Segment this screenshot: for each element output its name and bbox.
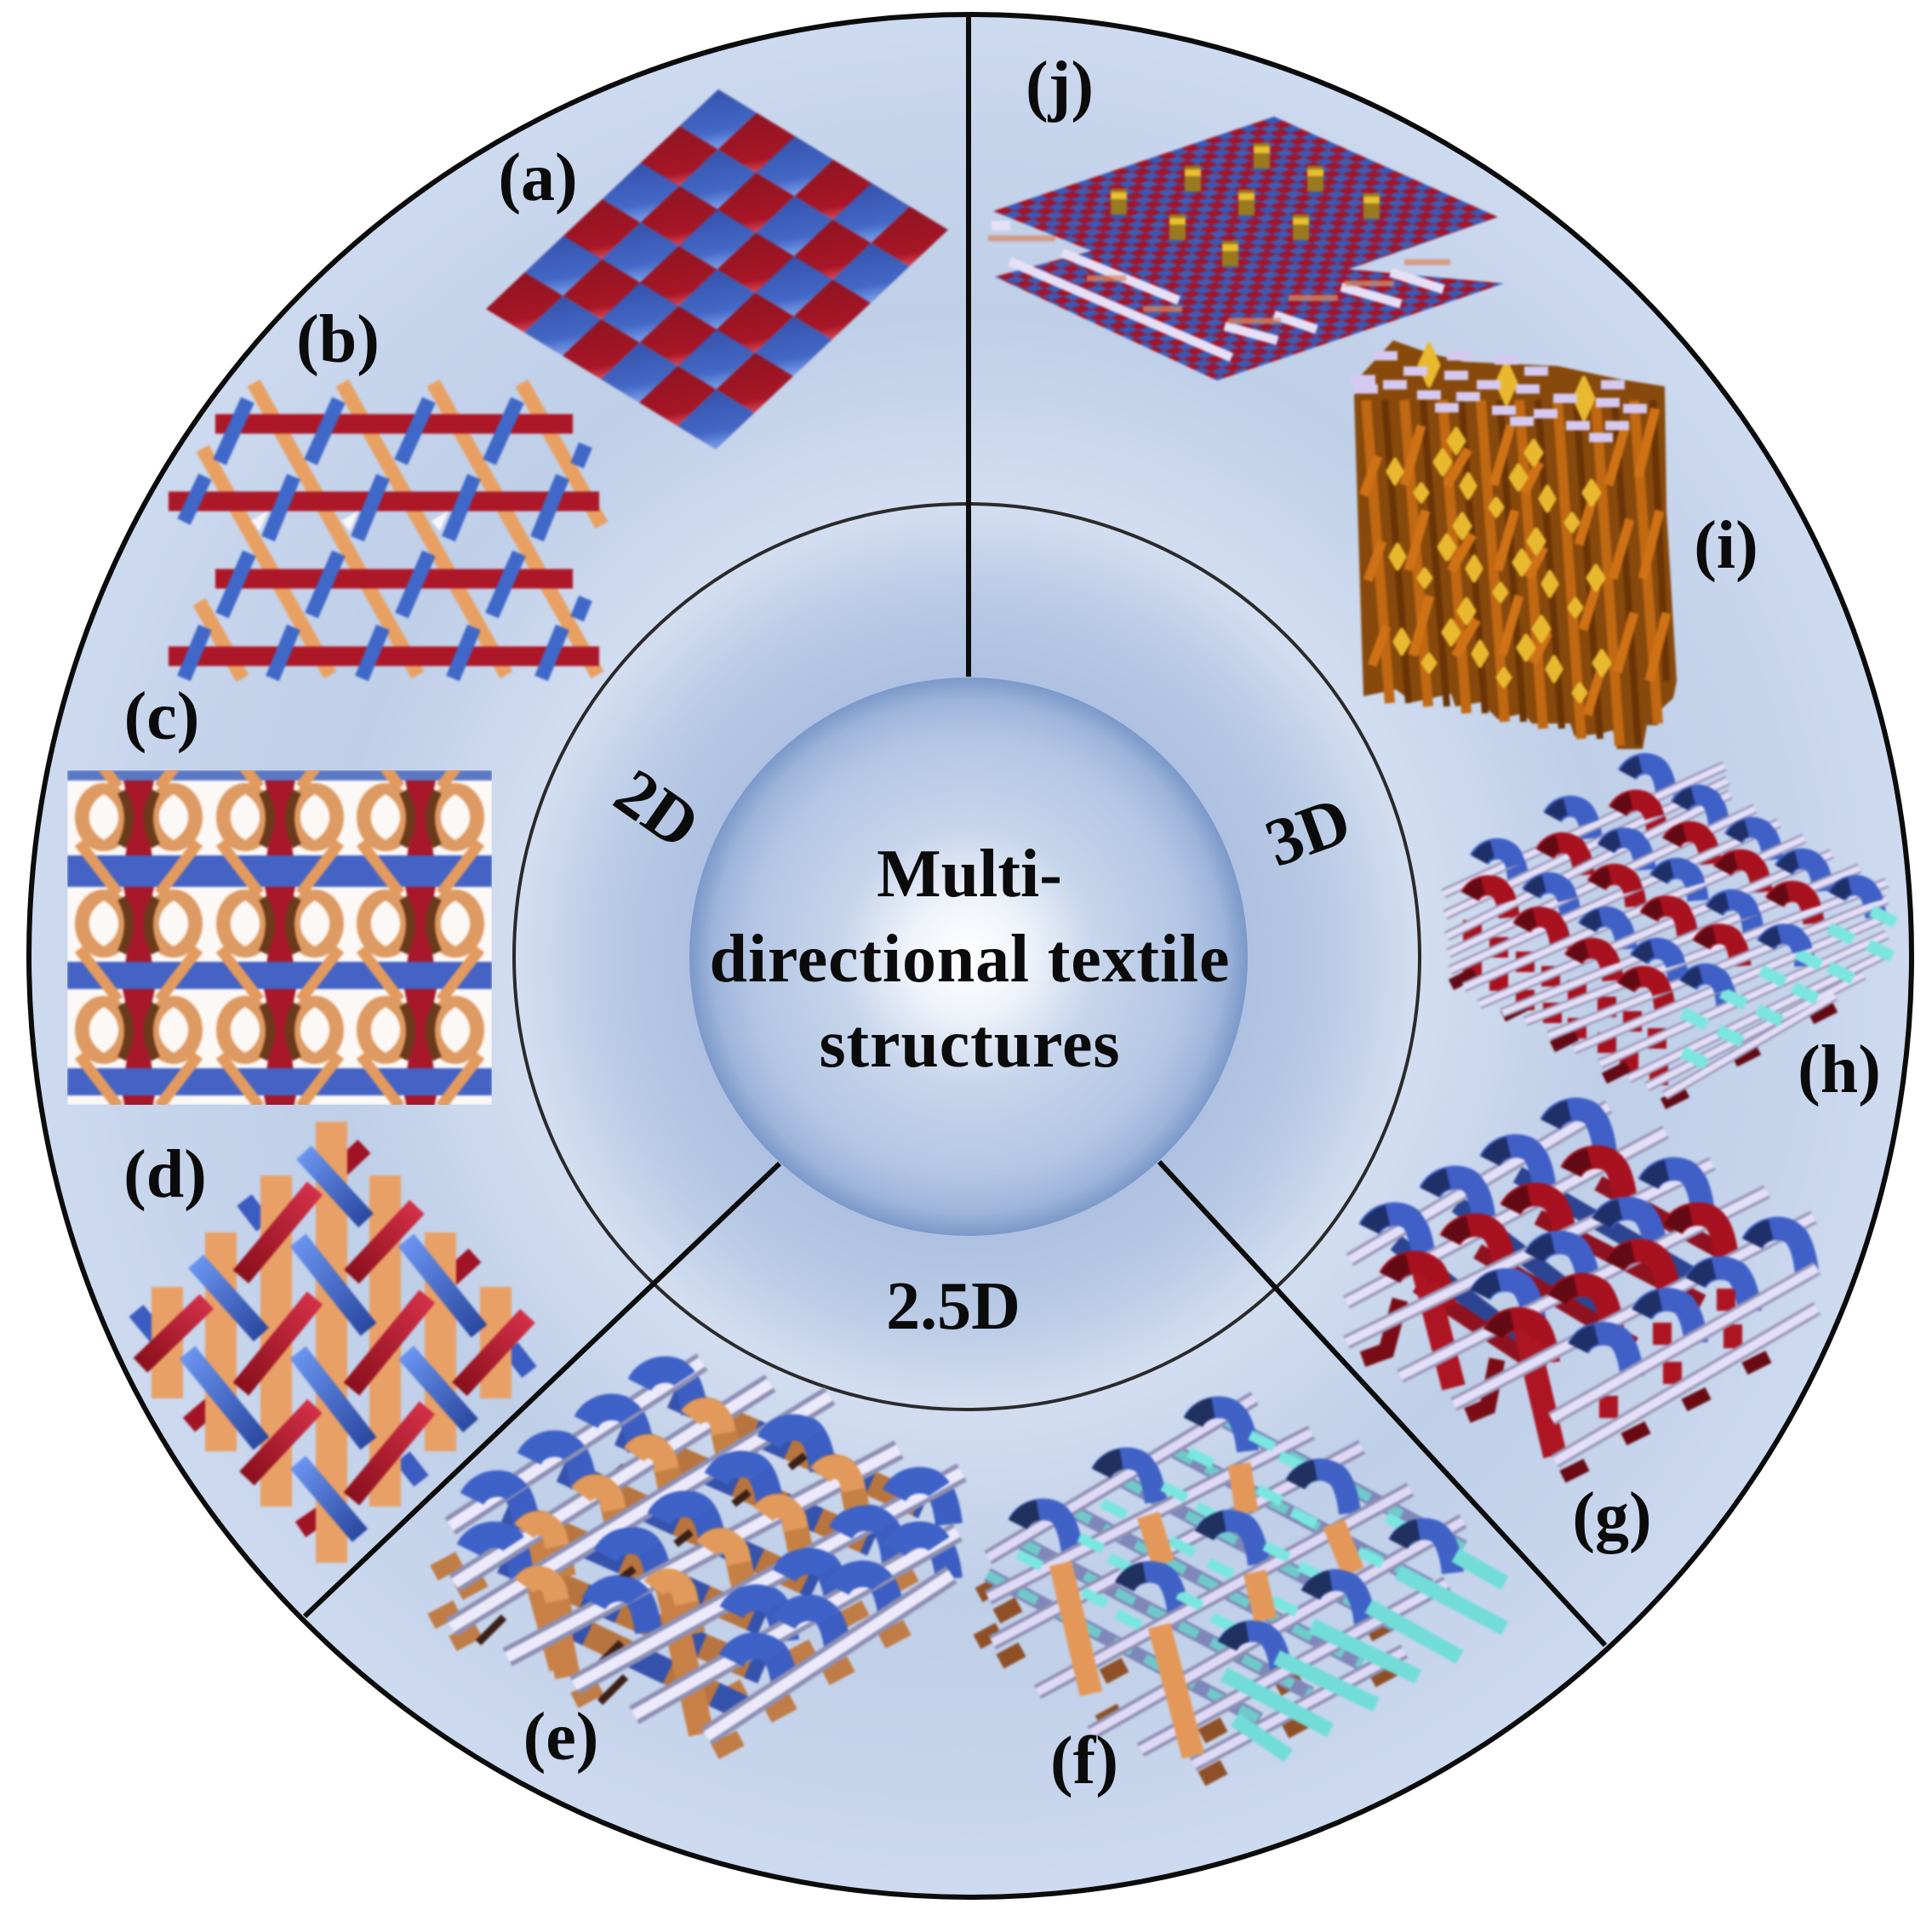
red binders — [1470, 800, 1814, 1009]
panel g: 3D interlock red and blue — [1346, 1106, 1817, 1477]
long cyan stuffer yarns — [1224, 1555, 1505, 1756]
red hook bodies over rods — [1390, 1158, 1727, 1363]
orange diagonal yarns — [199, 383, 602, 678]
blue heads — [469, 1370, 949, 1690]
red blobs — [1609, 1289, 1733, 1418]
panel f: 2.5D with cyan stuffer yarns — [977, 1398, 1505, 1779]
lower fabric layer — [995, 247, 1504, 380]
orange binder legs — [524, 1410, 860, 1734]
blue bars — [67, 770, 492, 1095]
category label: 2D: 2D — [602, 755, 712, 864]
blue binder legs — [469, 1370, 949, 1690]
red stubs — [189, 1146, 475, 1530]
orange loops — [73, 770, 486, 1105]
red heads — [1390, 1158, 1727, 1363]
lilac rods — [450, 1362, 962, 1736]
red horizontal yarns — [169, 424, 599, 656]
cyan stuffer pieces — [1683, 911, 1895, 1064]
label j: (j) — [1026, 49, 1094, 123]
label e: (e) — [523, 1700, 598, 1775]
peg tops — [1111, 146, 1380, 251]
panel a: plain weave — [486, 89, 948, 449]
blue stubs — [136, 1200, 529, 1481]
orange heads — [524, 1410, 860, 1634]
woven underlay — [502, 1396, 923, 1711]
upper fabric layer — [993, 117, 1498, 309]
category label: 3D: 3D — [1256, 782, 1360, 882]
white stripes on lower layer — [992, 226, 1443, 357]
orange warp bars — [151, 1122, 512, 1563]
panel j: stitched laminates — [988, 117, 1504, 380]
dark red underlay — [1417, 1183, 1736, 1362]
blue hook bodies over rods — [1369, 1110, 1807, 1377]
dark red ends — [1451, 973, 1835, 1104]
blue binders — [1018, 1408, 1453, 1675]
cyan stuffer pieces — [1018, 1435, 1410, 1629]
grey-lilac underlay lattice — [987, 1421, 1464, 1719]
yellow inserts — [1388, 345, 1609, 701]
lilac rods — [1443, 766, 1887, 1095]
blue yarns — [187, 1152, 479, 1535]
orange stripes on lower layer — [988, 238, 1450, 321]
panel c: knitted fabric — [67, 770, 492, 1105]
title: structures — [819, 1007, 1120, 1082]
label c: (c) — [124, 679, 199, 754]
sector divider: lower right — [1159, 1162, 1605, 1645]
red columns — [121, 779, 438, 1105]
centre hub with title — [689, 678, 1248, 1236]
panel h: 3D interlock with cyan stuffers — [1443, 763, 1895, 1104]
blue hook bodies over rods — [1479, 763, 1876, 1006]
dark shadows — [478, 1430, 805, 1702]
label h: (h) — [1798, 1032, 1881, 1107]
sector divider: top — [966, 14, 971, 677]
label g: (g) — [1572, 1479, 1652, 1554]
blue binders — [1479, 763, 1876, 1006]
dark blue underlay — [1396, 1175, 1694, 1362]
blue heads — [1018, 1408, 1453, 1675]
orange stubs underneath — [432, 1559, 915, 1752]
orange strands running down — [1366, 400, 1658, 746]
label a: (a) — [498, 140, 578, 215]
lower red legs — [1472, 920, 1659, 1085]
title: Multi- — [877, 837, 1062, 912]
sector divider: lower left — [305, 1164, 780, 1616]
title: directional textile — [710, 922, 1229, 997]
yellow stitching pegs — [1111, 143, 1380, 266]
panel d: biaxial braid over warp bars — [136, 1122, 529, 1563]
lilac rods — [988, 1398, 1463, 1764]
red heads — [1470, 800, 1814, 1009]
label d: (d) — [123, 1137, 207, 1212]
panel e: 2.5D angle-interlock with orange and blue binders — [432, 1362, 962, 1752]
label f: (f) — [1050, 1724, 1118, 1798]
lilac rods — [1346, 1106, 1817, 1461]
label b: (b) — [296, 302, 380, 377]
blue binders — [1369, 1110, 1807, 1377]
block body — [1354, 340, 1677, 749]
crossing bright strands — [1363, 409, 1666, 715]
dark gaps between strands — [1385, 400, 1666, 746]
panel i: 3D braided block — [1352, 340, 1677, 749]
blue hook bodies over rods — [1018, 1408, 1453, 1675]
red binders — [1390, 1158, 1727, 1363]
blue heads — [1479, 763, 1876, 1006]
panel b: triaxial open weave — [169, 383, 602, 678]
red hook bodies over rods — [1470, 800, 1814, 1009]
orange binder legs — [1060, 1464, 1353, 1756]
red yarns — [140, 1188, 528, 1499]
category label: 2.5D: 2.5D — [886, 1269, 1020, 1344]
long red legs — [1423, 1268, 1555, 1455]
blue diagonal yarns — [184, 400, 586, 678]
label i: (i) — [1694, 508, 1758, 583]
blue heads — [1369, 1110, 1807, 1377]
middle ring — [514, 504, 1420, 1410]
orange-brown stubs — [977, 1583, 1394, 1779]
white gaps — [251, 511, 449, 531]
lilac yarn ends on top face — [1352, 356, 1647, 437]
